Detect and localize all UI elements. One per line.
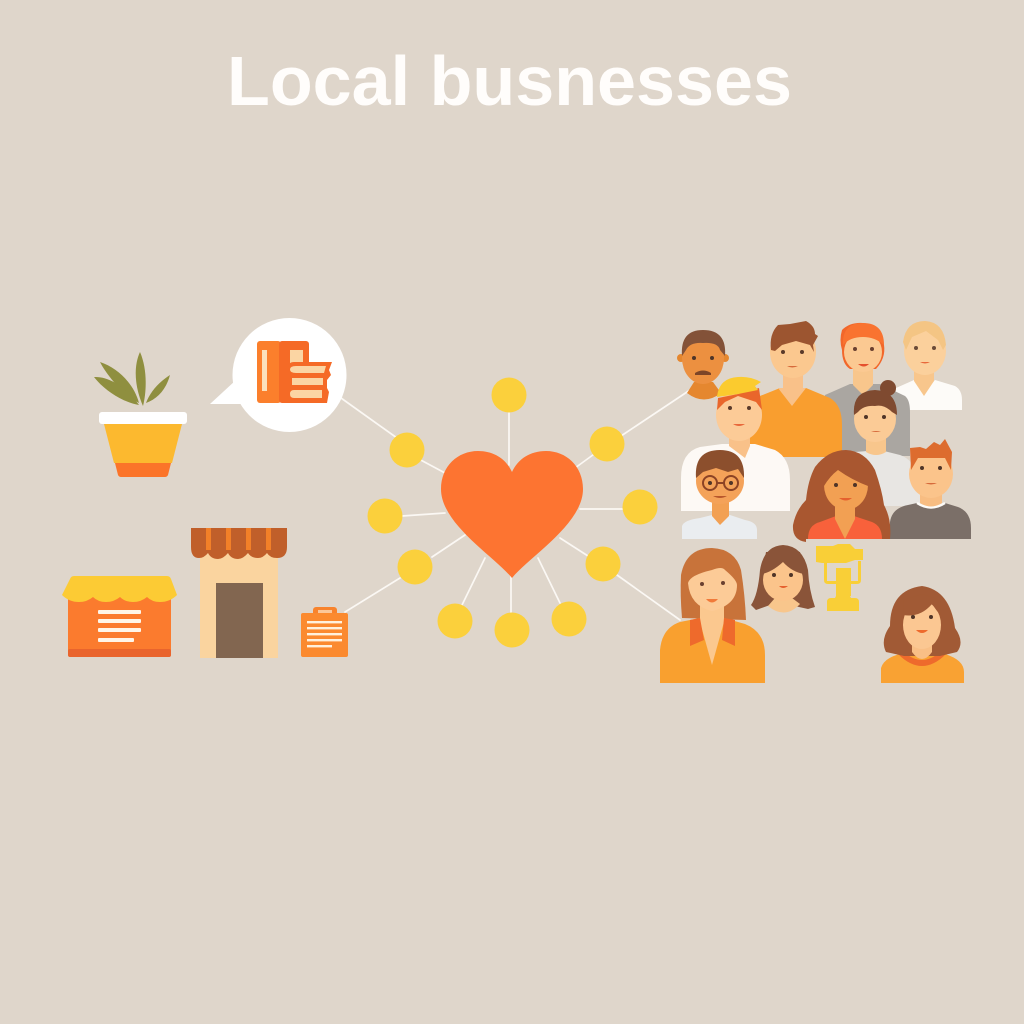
- person: man with moustache: [677, 330, 729, 400]
- awning: [191, 528, 287, 559]
- network nodes: [368, 378, 658, 648]
- title: Local busnesses: [227, 42, 792, 120]
- shop body: [68, 596, 171, 657]
- door: [216, 583, 263, 658]
- pot: [104, 424, 182, 463]
- person: woman with bob hair in orange top: [881, 586, 964, 683]
- person: woman with dark brown hair: [751, 545, 815, 613]
- icon: clipboard: [301, 607, 348, 657]
- bubble: [210, 318, 346, 432]
- person: woman with long wavy hair: [793, 450, 890, 542]
- person: man with spiky red hair in grey sweater: [890, 439, 971, 539]
- icon: small shop: [62, 576, 177, 657]
- icon: trophy: [816, 544, 863, 611]
- speech bubble with books: [210, 318, 346, 432]
- central heart: [441, 451, 583, 578]
- person: woman with auburn hair in orange blouse: [660, 548, 765, 683]
- shop awning: [62, 576, 177, 602]
- icon: tall storefront: [191, 528, 287, 658]
- connector lines: [341, 390, 690, 620]
- plant leaves: [94, 352, 170, 406]
- people group: [660, 321, 971, 683]
- person: man with yellow and orange hair in white shirt: [681, 377, 790, 511]
- person: woman with red hair in grey top: [825, 323, 910, 456]
- icon: books: [257, 341, 332, 403]
- building: [200, 550, 278, 658]
- person: woman with hair bun: [854, 380, 920, 506]
- person: man in orange sweater: [750, 321, 842, 457]
- person: boy with glasses: [682, 450, 757, 539]
- shop sign lines: [98, 610, 141, 642]
- icon: potted plant: [94, 352, 187, 477]
- person: blond man in white tee: [896, 321, 962, 410]
